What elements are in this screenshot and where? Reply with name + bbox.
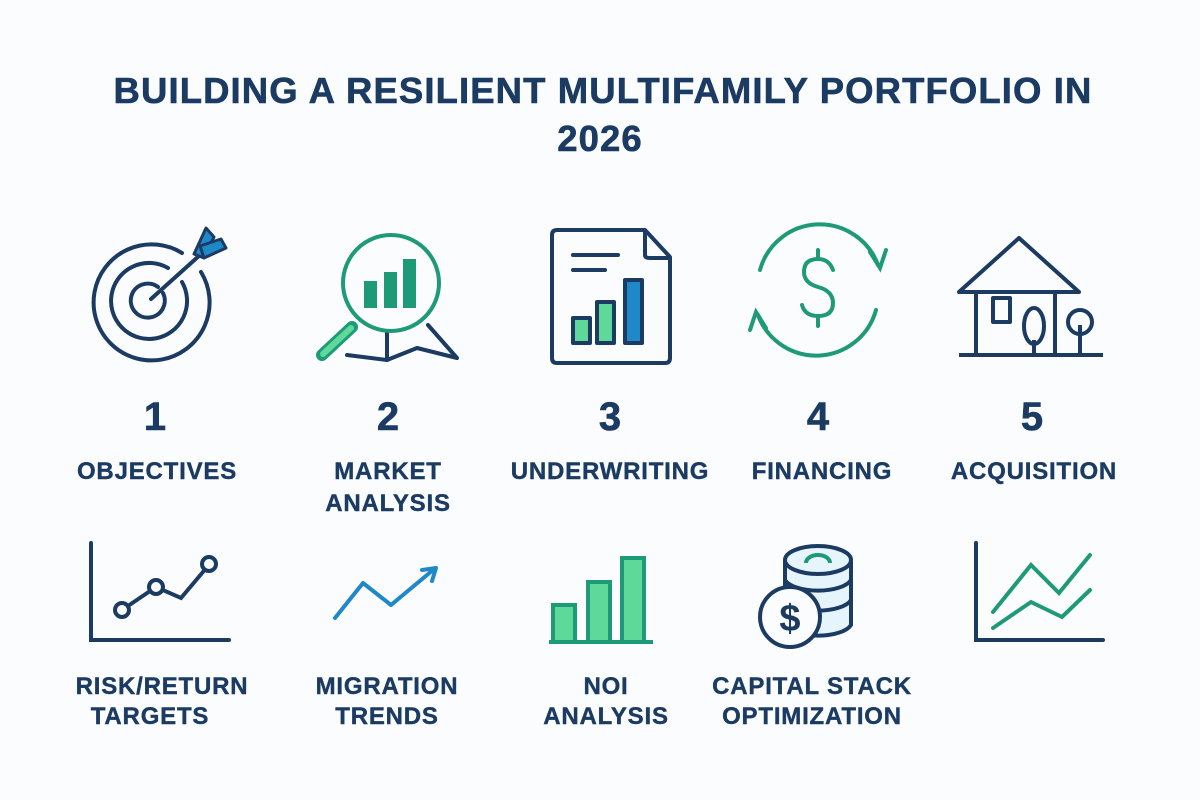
- labels: sub-topics: OPTIMIZATION: [722, 703, 902, 730]
- icon: coin stack: $: [779, 598, 801, 640]
- labels: steps: FINANCING: [752, 458, 892, 485]
- icon: target: [94, 228, 226, 360]
- labels: steps: ACQUISITION: [951, 458, 1117, 485]
- step numbers: 1: [144, 395, 166, 439]
- icon: risk return chart: [91, 543, 229, 640]
- labels: sub-topics: CAPITAL STACK: [712, 673, 912, 700]
- icon: migration arrow: [335, 568, 436, 618]
- icon: underwriting doc: [552, 230, 670, 363]
- labels: sub-topics: TRENDS: [335, 703, 439, 730]
- step numbers: 3: [599, 395, 621, 439]
- icon: NOI bars: [549, 558, 653, 642]
- labels: sub-topics: ANALYSIS: [543, 703, 669, 730]
- step numbers: 4: [807, 395, 830, 439]
- title: BUILDING A RESILIENT MULTIFAMILY PORTFOLIO IN: [114, 70, 1092, 111]
- step numbers: 5: [1021, 395, 1043, 439]
- title: [114, 70, 1092, 159]
- labels: steps: UNDERWRITING: [511, 458, 709, 485]
- labels: steps: OBJECTIVES: [77, 458, 237, 485]
- labels: sub-topics: NOI: [583, 673, 629, 700]
- icon: coin stack: [760, 546, 851, 647]
- labels: steps: MARKET: [334, 458, 442, 485]
- step numbers: [144, 395, 1043, 439]
- icon: market magnifier: [322, 235, 457, 360]
- icon: house: [959, 238, 1103, 355]
- labels: steps: [77, 458, 1117, 517]
- labels: steps: ANALYSIS: [325, 490, 451, 517]
- labels: sub-topics: TARGETS: [91, 703, 209, 730]
- icon: financing dollar cycle: [750, 224, 886, 356]
- labels: sub-topics: [76, 673, 912, 730]
- labels: sub-topics: MIGRATION: [316, 673, 458, 700]
- step numbers: 2: [377, 395, 399, 439]
- icon: growth chart: [976, 543, 1103, 640]
- title: 2026: [557, 118, 643, 159]
- labels: sub-topics: RISK/RETURN: [76, 673, 248, 700]
